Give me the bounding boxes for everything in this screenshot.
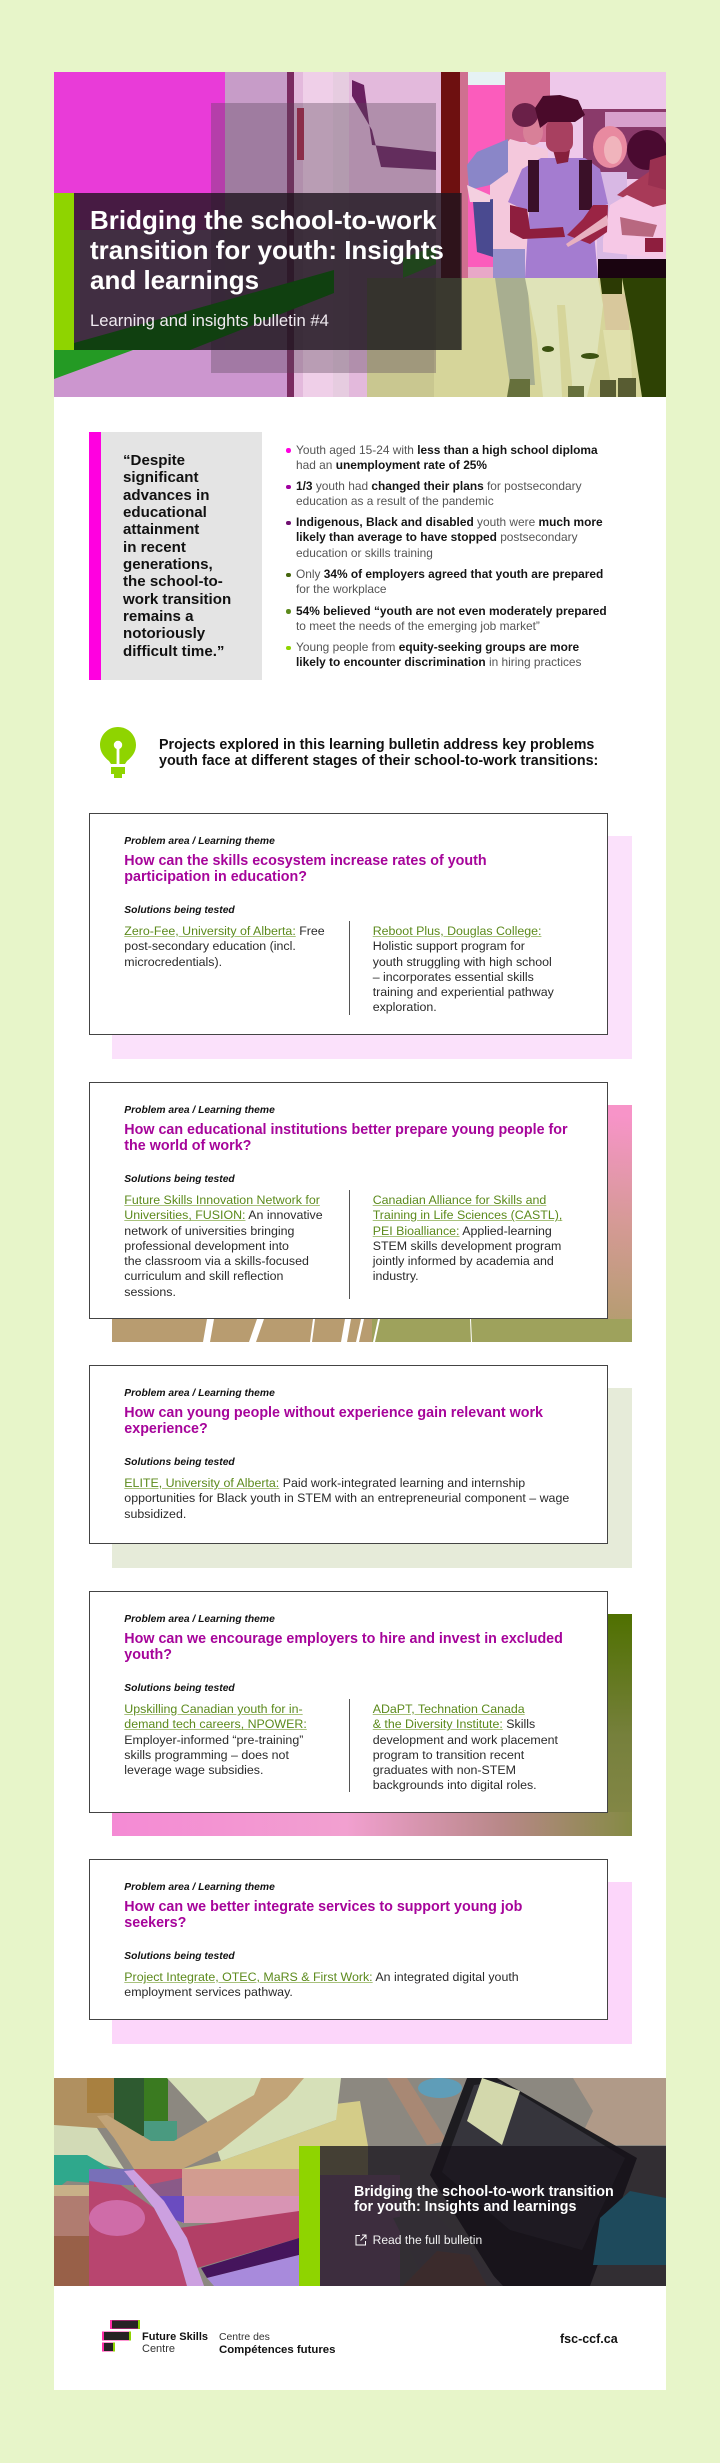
bullet: changed plans: 1/3 youth had changed their plans for postsecondary [296,479,582,493]
card 3 heading [124,1405,543,1437]
bullet: not prepared: 54% believed “youth are not even moderately prepared [296,604,607,618]
quote text: the school-to- [123,573,223,590]
logo: Future Skills Centre [102,2320,335,2356]
card 2 right solution: Training in Life Sciences (CASTL), [373,1208,562,1222]
website address: fsc-ccf.ca [560,2332,618,2346]
card 3 solution: opportunities for Black youth in STEM with an entrepreneurial component – wage [124,1491,569,1505]
card 5 heading: How can we better integrate services to support young job [124,1899,522,1915]
intro to projects: Projects explored in this learning bulletin address key problems [159,737,594,753]
card 4 heading: How can we encourage employers to hire and invest in excluded [124,1631,563,1647]
card 2 solutions label: Solutions being tested [124,1174,235,1185]
card 5 heading [124,1899,522,1931]
card 2 left solution [124,1193,323,1299]
quote text: attainment [123,521,199,538]
bullet: stopped education [286,515,603,560]
bullet: employers: Only 34% of employers agreed that youth are prepared [296,567,603,581]
card 1 left solution: post-secondary education (incl. [124,939,296,953]
quote text: difficult time.” [123,643,224,660]
card 3 solution: ELITE, University of Alberta: Paid work-integrated learning and internship [124,1476,525,1490]
panel: card 5 [89,1859,632,2044]
closing title [354,2184,614,2215]
bullet: unemployment [286,442,598,472]
photo background [468,72,666,278]
bullet: employers [286,567,603,596]
bullet: discrimination: Young people from equity-seeking groups are more [296,640,579,654]
card 1 left solution: microcredentials). [124,955,222,969]
quote text: work transition [123,591,231,608]
card 4 left solution: demand tech careers, NPOWER: [124,1717,307,1731]
card 3 label: Problem area / Learning theme [124,1388,275,1399]
quote text: “Despite [123,452,185,469]
card 1 left solution [124,924,325,969]
card 5 solution: employment services pathway. [124,1985,293,1999]
hero subtitle: Learning and insights bulletin #4 [90,311,329,330]
card 4 right solution: ADaPT, Technation Canada [373,1702,525,1716]
card 2 heading [124,1122,568,1154]
bullet: not prepared: to meet the needs of the emerging job market” [296,619,540,633]
logo mark [102,2320,140,2352]
card 4 heading [124,1631,563,1663]
bullet: changed plans [286,479,582,508]
card 1 left solution: Zero-Fee, University of Alberta: Free [124,924,325,938]
card 2 left solution: curriculum and skill reflection [124,1269,283,1283]
card 2 left solution: network of universities bringing [124,1224,294,1238]
panel: card 1 [89,813,632,1059]
card 2 label: Problem area / Learning theme [124,1105,275,1116]
card 5 box [89,1859,608,2020]
card 2 right solution: industry. [373,1269,419,1283]
floor [367,278,666,397]
green accent bar [54,193,74,350]
logo French name: Compétences futures [219,2344,335,2356]
card 4 right solution [372,1702,558,1792]
card 2 column divider [348,1190,350,1299]
logo English name [142,2331,208,2355]
quote text: generations, [123,556,213,573]
card 4 left solution [124,1702,307,1777]
card 3 solution [124,1476,569,1521]
card 1 box [89,813,608,1035]
card 3 box [89,1365,608,1544]
card 2 textured backing [112,1105,632,1342]
hero title [90,205,444,295]
card 2 right solution: STEM skills development program [373,1239,561,1253]
statistics list [286,442,607,669]
bullet: not prepared [286,604,607,633]
bullet: employers: for the workplace [296,582,387,596]
closing photo collage [54,2078,666,2286]
card 4 column divider [348,1699,350,1792]
quote text: remains a [123,608,193,625]
magenta quote bar [89,432,100,680]
card 3 heading: experience? [124,1421,208,1437]
bullet: discrimination: likely to encounter discrimination in hiring practices [296,655,581,669]
card 2 box [89,1082,608,1319]
hero banner [54,72,666,397]
closing green bar [299,2146,320,2286]
closing title: Bridging the school-to-work transition [354,2184,614,2200]
card 4 right solution: development and work placement [373,1733,558,1747]
bullet: changed plans: education as a result of the pandemic [296,494,494,508]
card 2 heading: the world of work? [124,1138,251,1154]
closing banner [54,2078,666,2286]
quote text: significant [123,469,198,486]
quote text: educational [123,504,207,521]
card 5 label: Problem area / Learning theme [124,1882,275,1893]
card 1 heading [124,853,487,885]
card 1 label: Problem area / Learning theme [124,836,275,847]
card 4 box [89,1591,608,1813]
white page panel [54,72,666,2390]
card 2 heading: How can educational institutions better prepare young people for [124,1122,568,1138]
card 1 column divider [348,921,350,1015]
bullet: stopped education: likely than average to have stopped postsecondary [296,530,578,544]
card 4 label: Problem area / Learning theme [124,1614,275,1625]
card 2 left solution: sessions. [124,1285,176,1299]
panel: card 3 [89,1365,632,1568]
logo French name: Centre des [219,2332,270,2343]
card 3 backing [112,1388,632,1568]
card 4 left solution: leverage wage subsidies. [124,1763,263,1777]
card 3 solutions label: Solutions being tested [124,1457,235,1468]
hero title: Bridging the school-to-work [90,205,437,235]
card 1 heading: participation in education? [124,869,307,885]
card 1 right solution: youth struggling with high school [373,955,552,969]
dark green right edge over floor [211,103,436,373]
logo English name: Centre [142,2343,175,2355]
card 4 solutions label: Solutions being tested [124,1683,235,1694]
card 5 solutions label: Solutions being tested [124,1951,235,1962]
card 1 right solution: exploration. [373,1000,437,1014]
card 4 right solution: program to transition recent [373,1748,524,1762]
card 2 right solution [372,1193,562,1283]
person centre [525,278,603,397]
icon: external link [356,2234,366,2246]
quote panel [89,432,262,680]
card 4 heading: youth? [124,1647,172,1663]
icon: light bulb [100,727,136,778]
hero title: transition for youth: Insights [90,235,444,265]
card 1 right solution: training and experiential pathway [373,985,554,999]
card 5 backing [112,1882,632,2044]
person right front [622,278,666,397]
panel: card 4 [89,1591,632,1836]
card 3 solution: subsidized. [124,1507,186,1521]
quote text [123,452,231,660]
hero title: and learnings [90,265,259,295]
card 4 right solution: graduates with non-STEM [373,1763,516,1777]
card 2 right solution: PEI Bioalliance: Applied-learning [373,1224,552,1238]
card 2 left solution: professional development into [124,1239,289,1253]
quote text: notoriously [123,625,205,642]
bullet: stopped education: education or skills training [296,546,433,560]
bullet: stopped education: Indigenous, Black and disabled youth were much more [296,515,603,529]
card 2 right solution: Canadian Alliance for Skills and [373,1193,546,1207]
intro to projects [159,737,598,768]
quote text: advances in [123,487,209,504]
quote text: in recent [123,539,186,556]
intro to projects: youth face at different stages of their school-to-work transitions: [159,752,598,768]
card 4 left solution: Upskilling Canadian youth for in- [124,1702,303,1716]
person right back [597,172,627,259]
bullet: unemployment: had an unemployment rate of 25% [296,458,487,472]
card 4 right solution: & the Diversity Institute: Skills [373,1717,535,1731]
closing title: for youth: Insights and learnings [354,2199,576,2215]
logo French name [219,2331,335,2356]
card 4 left solution: skills programming – does not [124,1748,289,1762]
card 2 left solution: Universities, FUSION: An innovative [124,1208,323,1222]
card 4 left solution: Employer-informed “pre-training” [124,1733,303,1747]
card 3 heading: How can young people without experience gain relevant work [124,1405,543,1421]
card 5 solution: Project Integrate, OTEC, MaRS & First Work: An integrated digital youth [124,1970,519,1984]
bullet: unemployment: Youth aged 15-24 with less than a high school diploma [296,442,598,456]
panel: card 2 [89,1082,632,1342]
card 4 right solution: backgrounds into digital roles. [373,1778,537,1792]
card 5 solution [124,1970,519,1999]
card 1 right solution: – incorporates essential skills [373,970,534,984]
card 1 right solution [372,924,554,1014]
card 5 heading: seekers? [124,1915,186,1931]
read the full bulletin link: Read the full bulletin [373,2233,482,2247]
card 1 solutions label: Solutions being tested [124,905,235,916]
person left [495,278,535,385]
card 1 right solution: Holistic support program for [373,939,525,953]
card 1 heading: How can the skills ecosystem increase rates of youth [124,853,487,869]
logo English name: Future Skills [142,2331,208,2343]
card 4 textured backing [112,1614,632,1836]
card 2 left solution: Future Skills Innovation Network for [124,1193,320,1207]
card 1 right solution: Reboot Plus, Douglas College: [373,924,541,938]
card 1 backing [112,836,632,1059]
bullet: discrimination [286,640,581,669]
card 2 right solution: jointly informed by academia and [373,1254,554,1268]
card 2 left solution: the classroom via a skills-focused [124,1254,309,1268]
hero photo collage [54,72,666,397]
